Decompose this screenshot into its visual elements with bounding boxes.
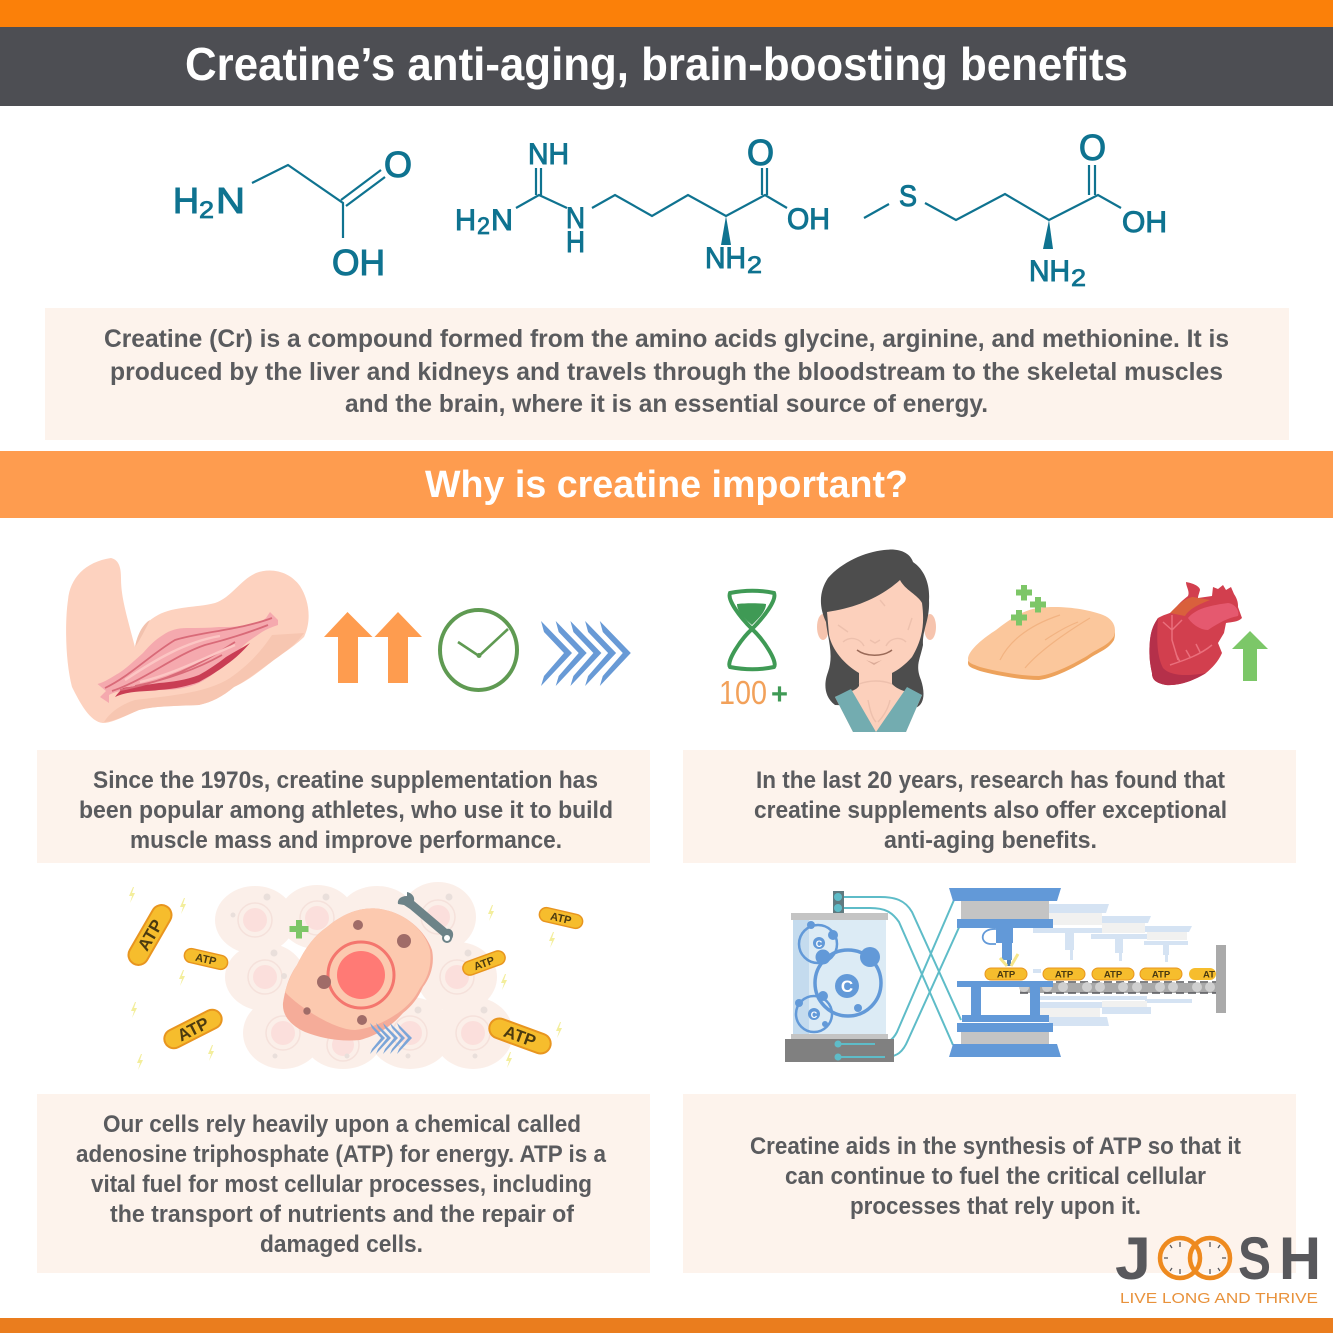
ATP pills on conveyor [985,968,1216,980]
arrows: up [324,612,422,683]
icon: hourglass with 100+ [719,591,788,711]
chemical structure: arginine: H [566,226,585,259]
ATP pills on conveyor: ATP [1104,970,1123,980]
text panel: athletes: muscle mass and improve performance. [130,827,562,854]
logo: Joosh: H [1279,1225,1321,1292]
logo: Joosh: J [1115,1225,1151,1292]
ATP pills on conveyor: ATP [1055,970,1074,980]
text panel: athletes: Since the 1970s, creatine supplementation has [93,767,598,794]
intro panel: Creatine (Cr) is a compound formed from the amino acids glycine, arginine, and methionine. It is [104,325,1229,353]
chemical structure: arginine: 2 [477,213,490,240]
creatine molecules: C [841,977,853,996]
text panel: ATP explanation: adenosine triphosphate (ATP) for energy. ATP is a [76,1141,607,1168]
text panel: creatine aids ATP synthesis [683,1094,1296,1273]
energy bolts [129,887,562,1070]
chemical structure: arginine: N [566,202,585,235]
illustration: cells and ATP [125,882,584,1070]
ATP pills: ATP [501,1022,538,1051]
text panel: ATP explanation: the transport of nutrients and the repair of [110,1201,575,1228]
title banner: Creatine’s anti-aging, brain-boosting benefits [185,38,1128,90]
chemical structure: methionine: S [899,180,917,213]
text panel: ATP explanation [37,1094,650,1273]
ATP pills: ATP [472,955,496,973]
chemical structure: glycine: H [173,180,199,221]
icon: speed chevrons [541,621,631,686]
main cell [283,908,433,1041]
intro panel: produced by the liver and kidneys and travels through the bloodstream to the skeletal muscles [110,358,1223,386]
creatine molecules [795,921,881,1032]
ATP pills: ATP [134,916,167,954]
chemical structure: methionine: NH [1029,255,1070,288]
ATP pills [125,901,584,1056]
chemical structure: arginine: O [747,132,774,173]
intro panel [45,308,1289,440]
chemical structure: methionine: 2 [1071,265,1086,292]
chemical structure: arginine: H [455,204,476,237]
icon: clock [440,610,517,690]
text panel: athletes [37,750,650,863]
icon: older woman portrait [817,550,936,732]
icon: wrench [398,892,453,942]
icon: repair plus [290,920,308,938]
chemical structure: arginine: 2 [747,252,762,279]
chemical structure: glycine: O [384,144,412,185]
creatine molecules: C [811,1010,818,1020]
icon: hourglass with 100+: 100 [719,674,767,711]
ATP pills on conveyor: ATP [997,970,1016,980]
title banner [0,27,1333,106]
text panel: athletes: been popular among athletes, who use it to build [79,797,613,824]
background cells [215,882,513,1069]
text panel: anti-aging: In the last 20 years, research has found that [756,767,1225,794]
text panel: anti-aging: creatine supplements also offer exceptional [754,797,1227,824]
top orange band [0,0,1333,27]
chemical structure: methionine: OH [1122,206,1167,239]
conveyor [1019,945,1226,1013]
illustration: ATP synthesis machine [785,888,1226,1062]
chemical structure: glycine: 2 [199,197,214,224]
chemical structure: arginine: N [491,204,513,237]
text panel: ATP explanation: vital fuel for most cellular processes, including [91,1171,592,1198]
section heading band [0,451,1333,518]
ATP pills on conveyor: AT [1203,970,1215,980]
chemical structure: methionine: O [1079,127,1106,168]
icon: hourglass with 100+: + [771,678,788,711]
chemical structure: glycine [173,144,412,283]
ATP pills: ATP [174,1014,212,1045]
logo: Joosh [1115,1225,1321,1307]
chemical structure: arginine: NH [528,138,569,171]
chemical structure: arginine [455,132,830,279]
text panel: creatine aids ATP synthesis: can continue to fuel the critical cellular [785,1163,1206,1190]
text panel: creatine aids ATP synthesis: Creatine aids in the synthesis of ATP so that it [750,1133,1241,1160]
logo: Joosh: LIVE LONG AND THRIVE [1120,1290,1318,1307]
chemical structure: arginine: OH [787,203,830,236]
icon: chicken breast with plus signs [968,585,1115,680]
ATP pills: ATP [194,952,217,968]
ghost press frames [1033,904,1192,1026]
icon: heart with up arrow [1149,582,1268,685]
chemical structure: glycine: OH [332,242,385,283]
wires [838,897,961,1057]
creatine molecules: C [816,939,823,949]
section heading band: Why is creatine important? [425,464,908,506]
text panel: ATP explanation: damaged cells. [260,1231,423,1258]
text panel: anti-aging: anti-aging benefits. [884,827,1097,854]
bottom orange band [0,1318,1333,1333]
text panel: anti-aging [683,750,1296,863]
text panel: creatine aids ATP synthesis: processes that rely upon it. [850,1193,1141,1220]
press [949,888,1061,1057]
logo: Joosh: S [1238,1225,1271,1292]
ATP pills on conveyor: ATP [1152,970,1171,980]
ATP pills: ATP [549,911,572,927]
chemical structure: glycine: N [216,180,245,221]
icon: arm with muscle [66,558,309,723]
tank [785,891,894,1062]
intro panel: and the brain, where it is an essential source of energy. [345,390,988,418]
text panel: ATP explanation: Our cells rely heavily upon a chemical called [103,1111,581,1138]
chemical structure: methionine [864,127,1167,292]
icon: small chevrons [370,1023,412,1054]
chemical structure: arginine: NH [705,242,746,275]
